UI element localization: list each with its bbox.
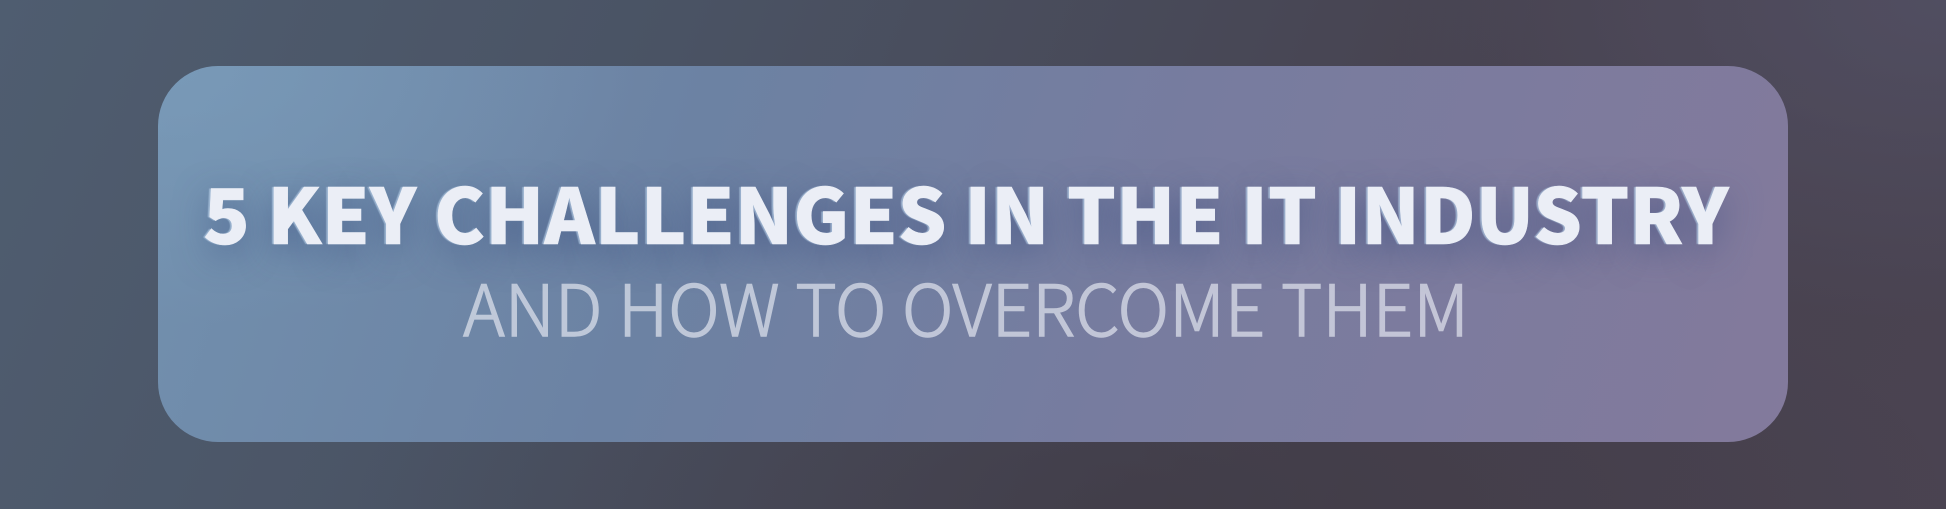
subtitle: AND HOW TO OVERCOME THEM bbox=[463, 254, 1469, 356]
title: 5 KEY CHALLENGES IN THE IT INDUSTRY bbox=[203, 156, 1729, 266]
panel: title card bbox=[158, 66, 1788, 442]
